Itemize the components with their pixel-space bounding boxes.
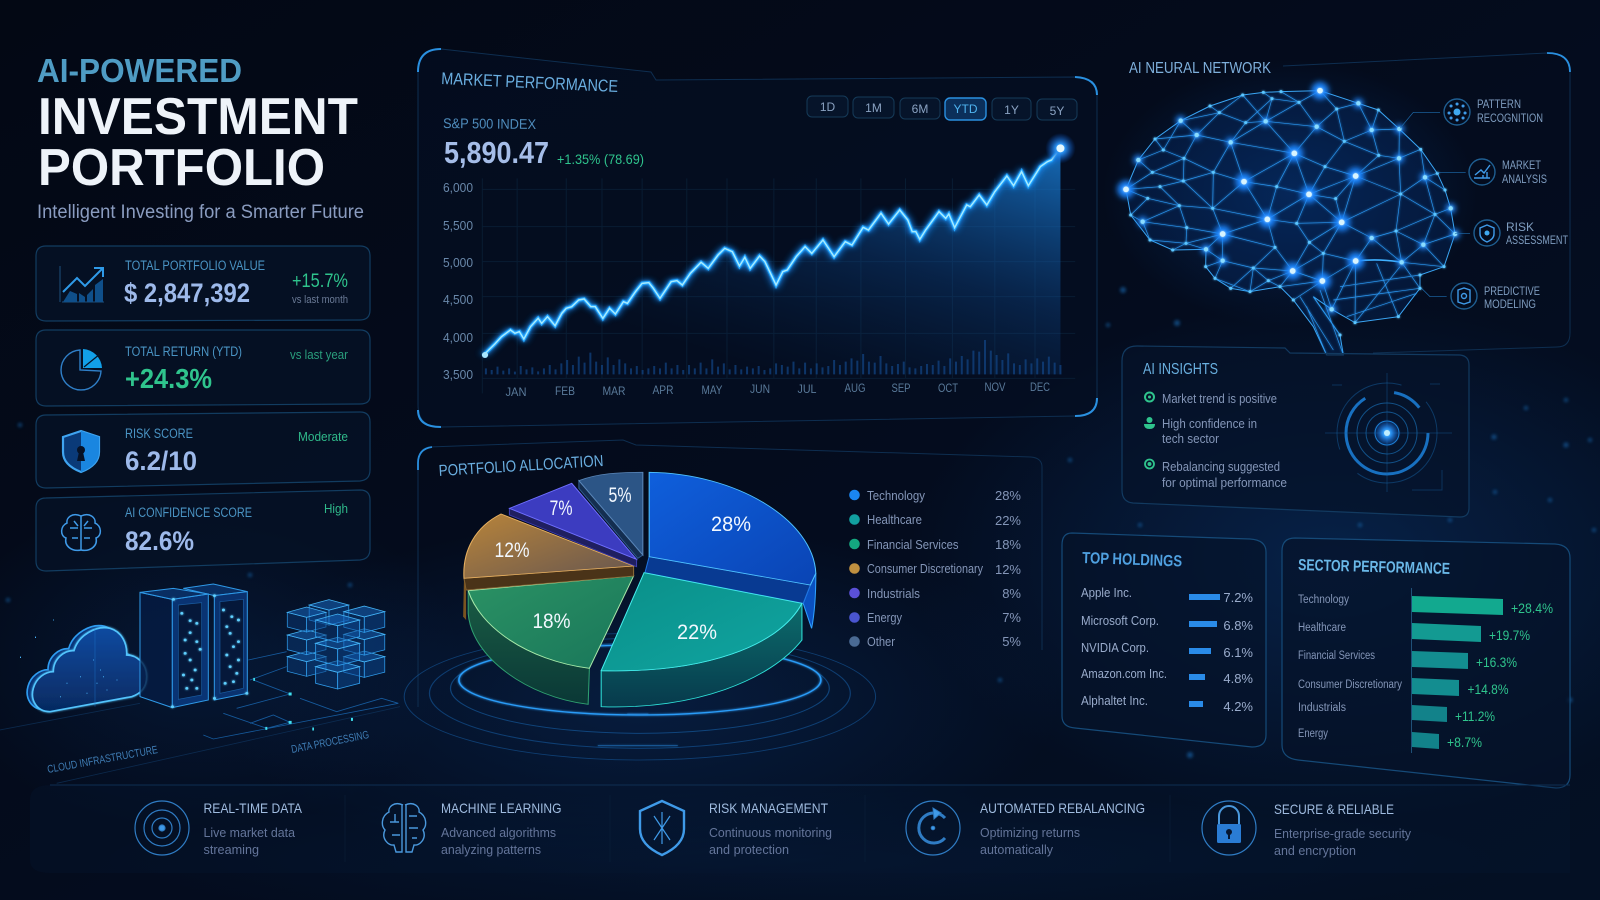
card: total portfolio value: [36, 246, 370, 321]
panel: AI insights: [1122, 346, 1469, 517]
slice: technology 28%: [645, 472, 816, 628]
legend: [849, 488, 1021, 649]
value: 82.6%: [125, 526, 194, 556]
bar values: [1447, 600, 1553, 750]
feature: secure and reliable: Enterprise-grade security: [1274, 826, 1411, 841]
slice: industrials 7%: [509, 483, 637, 567]
holdings rows: Microsoft Corp.: [1081, 613, 1159, 628]
holdings rows: 6.8%: [1223, 618, 1253, 633]
label: data processing: DATA PROCESSING: [290, 729, 370, 756]
holdings rows: 7.2%: [1223, 590, 1253, 605]
icon: growth chart: [60, 266, 104, 302]
bar values: +16.3%: [1476, 654, 1517, 670]
label: TOTAL PORTFOLIO VALUE: [125, 258, 265, 273]
holdings rows: Apple Inc.: [1081, 585, 1132, 600]
sector names: Healthcare: [1298, 622, 1346, 634]
feature: automated rebalancing: AUTOMATED REBALANCING: [980, 800, 1145, 816]
bar values: +28.4%: [1511, 600, 1553, 616]
month labels: JAN: [506, 385, 526, 399]
panel: portfolio allocation: [404, 440, 1042, 760]
feature: secure and reliable: SECURE & RELIABLE: [1274, 801, 1394, 817]
insight: tech confidence: [1144, 416, 1257, 446]
month labels: OCT: [938, 381, 959, 395]
heading: AI INSIGHTS: [1143, 361, 1218, 378]
feature: real-time data: streaming: [204, 842, 259, 857]
legend: Financial Services: [867, 537, 959, 552]
holdings rows: 4.8%: [1223, 671, 1253, 686]
month labels: MAY: [702, 383, 722, 397]
feature: real-time data: REAL-TIME DATA: [204, 800, 303, 816]
label: AI CONFIDENCE SCORE: [125, 505, 252, 520]
y axis labels: 4,500: [443, 292, 473, 307]
legend: 12%: [995, 562, 1021, 577]
pie labels: 28%: [711, 513, 751, 536]
comparison: vs last year: [290, 347, 349, 362]
time range buttons: 6M: [912, 102, 928, 116]
y axis labels: 3,500: [443, 367, 473, 382]
insight: rebalancing: Rebalancing suggested: [1162, 459, 1280, 474]
holdings rows: 6.1%: [1223, 645, 1253, 660]
y axis labels: 4,000: [443, 330, 473, 345]
month labels: [506, 380, 1050, 399]
y axis labels: 5,500: [443, 218, 473, 233]
holdings rows: Amazon.com Inc.: [1081, 666, 1167, 681]
brain network: [1103, 60, 1477, 355]
callout: risk assessment: RISK: [1506, 220, 1534, 234]
month labels: FEB: [555, 384, 575, 398]
sector names: Technology: [1298, 594, 1349, 606]
time range buttons: 1D: [820, 100, 836, 114]
callout: market analysis: ANALYSIS: [1502, 172, 1547, 186]
pie labels: 5%: [608, 484, 632, 507]
feature: risk management: [640, 800, 832, 857]
title: Investment: INVESTMENT: [38, 88, 358, 146]
legend: 8%: [1002, 586, 1021, 601]
sector names: Industrials: [1298, 702, 1346, 714]
feature: automated rebalancing: [906, 800, 1145, 857]
index value: 5,890.47: [444, 135, 549, 170]
feature: machine learning: Advanced algorithms: [441, 825, 556, 840]
time range buttons: YTD: [954, 102, 978, 116]
feature: machine learning: MACHINE LEARNING: [441, 800, 562, 816]
circuits and platform: [0, 652, 400, 783]
sector names: Consumer Discretionary: [1298, 679, 1402, 691]
label: TOTAL RETURN (YTD): [125, 344, 242, 359]
feature: risk management: RISK MANAGEMENT: [709, 800, 828, 816]
feature: risk management: and protection: [709, 842, 789, 857]
value: $ 2,847,392: [124, 278, 250, 308]
rating: Moderate: [298, 429, 348, 444]
feature: real-time data: Live market data: [204, 825, 296, 840]
slice: other 5%: [579, 472, 643, 558]
insight: tech confidence: tech sector: [1162, 431, 1220, 446]
comparison: vs last month: [292, 294, 348, 306]
y axis labels: 6,000: [443, 180, 473, 195]
callout: pattern recognition: [1444, 97, 1543, 125]
legend: 22%: [995, 513, 1021, 528]
bar values: +8.7%: [1447, 734, 1482, 750]
month labels: AUG: [844, 381, 866, 395]
panel: sector performance: [1282, 538, 1570, 788]
subtitle: Intelligent Investing for a Smarter Future: [37, 202, 364, 223]
heading: AI NEURAL NETWORK: [1129, 60, 1271, 77]
bar values: +19.7%: [1489, 627, 1530, 643]
legend: 18%: [995, 537, 1021, 552]
holdings rows: NVIDIA Corp.: [1081, 640, 1149, 655]
feature strip: [30, 785, 1570, 873]
callout: predictive modeling: [1451, 283, 1540, 311]
label: cloud infrastructure: CLOUD INFRASTRUCTURE: [46, 744, 159, 776]
feature: machine learning: analyzing patterns: [441, 842, 541, 857]
card: risk score: [36, 412, 370, 488]
callout: risk assessment: [1474, 220, 1568, 247]
pie labels: [494, 484, 751, 644]
value: +24.3%: [125, 363, 212, 394]
3D pie chart: [463, 472, 816, 707]
bar chart: [1412, 588, 1503, 753]
legend: Healthcare: [867, 512, 922, 527]
card: total return: [36, 330, 370, 406]
slice: healthcare 22%: [601, 573, 802, 707]
pie labels: 18%: [532, 610, 570, 633]
heading: MARKET PERFORMANCE: [441, 69, 618, 96]
index label: S&P 500 INDEX: [443, 115, 537, 132]
legend: Energy: [867, 610, 902, 625]
insight: tech confidence: High confidence in: [1162, 416, 1257, 431]
pie base rings: [404, 633, 876, 760]
month labels: DEC: [1030, 380, 1050, 394]
sector names: [1298, 594, 1402, 740]
icon: data cubes: [287, 600, 385, 689]
holdings rows: [1081, 585, 1253, 714]
month labels: SEP: [892, 381, 910, 395]
time range buttons: 5Y: [1050, 104, 1064, 118]
icon: pie: [61, 349, 102, 390]
insight: rebalancing: for optimal performance: [1162, 475, 1287, 490]
insight: market trend: Market trend is positive: [1162, 391, 1277, 406]
change: +15.7%: [292, 271, 348, 292]
callout: predictive modeling: PREDICTIVE: [1484, 284, 1540, 298]
holdings rows: Alphaltet Inc.: [1081, 693, 1148, 708]
legend: Consumer Discretionary: [867, 561, 983, 576]
time range buttons: [807, 96, 1077, 120]
legend: Other: [867, 634, 896, 649]
sector names: Financial Services: [1298, 650, 1375, 662]
feature: secure and reliable: and encryption: [1274, 843, 1356, 858]
feature: risk management: Continuous monitoring: [709, 825, 832, 840]
title: AI-Powered: AI-POWERED: [37, 52, 242, 89]
month labels: APR: [652, 383, 674, 397]
legend: Industrials: [867, 586, 920, 601]
callout: risk assessment: ASSESSMENT: [1506, 233, 1568, 247]
month labels: MAR: [602, 384, 626, 398]
heading: TOP HOLDINGS: [1082, 550, 1183, 570]
pie labels: 22%: [677, 621, 717, 644]
time range buttons: 1M: [865, 101, 882, 115]
infrastructure illustration: [0, 584, 400, 783]
feature: real-time data: [135, 800, 303, 857]
panel: AI neural network: [1103, 53, 1570, 355]
panel: market performance: [418, 49, 1097, 427]
pie labels: 7%: [550, 497, 572, 520]
heading: SECTOR PERFORMANCE: [1298, 557, 1451, 578]
card: AI confidence: [36, 490, 370, 571]
y axis labels: 5,000: [443, 255, 473, 270]
month labels: NOV: [984, 380, 1006, 394]
title block: [37, 52, 364, 223]
month labels: JUL: [798, 382, 817, 396]
feature: automated rebalancing: automatically: [980, 842, 1053, 857]
feature: machine learning: [382, 800, 562, 857]
callout: market analysis: [1469, 158, 1547, 186]
heading: PORTFOLIO ALLOCATION: [438, 453, 604, 480]
callout: market analysis: MARKET: [1502, 158, 1542, 172]
value: 6.2/10: [125, 446, 197, 476]
y axis labels: [443, 180, 473, 382]
sector names: Energy: [1298, 728, 1328, 740]
time range buttons: 1Y: [1004, 103, 1019, 117]
icon: shield: [63, 431, 99, 472]
slice: consumer discretionary 12%: [463, 514, 634, 620]
label: RISK SCORE: [125, 426, 193, 441]
line chart: [482, 133, 1076, 393]
callout: pattern recognition: RECOGNITION: [1477, 111, 1543, 125]
callout: predictive modeling: MODELING: [1484, 297, 1536, 311]
icon: brain: [62, 515, 100, 550]
icon: cloud: [20, 620, 147, 712]
feature: secure and reliable: [1202, 801, 1411, 858]
rating: High: [324, 501, 348, 516]
month labels: JUN: [750, 382, 770, 396]
insight: rebalancing: [1145, 459, 1287, 490]
callout: pattern recognition: PATTERN: [1477, 97, 1521, 111]
bar values: +11.2%: [1455, 708, 1495, 724]
slice: financial services 18%: [468, 576, 634, 704]
pie labels: 12%: [494, 539, 530, 562]
icon: server racks: [140, 584, 247, 708]
holdings rows: 4.2%: [1223, 699, 1253, 714]
index change: +1.35% (78.69): [557, 151, 644, 167]
legend: 7%: [1002, 610, 1021, 625]
legend: 28%: [995, 488, 1021, 503]
legend: 5%: [1002, 634, 1021, 649]
bar values: +14.8%: [1468, 681, 1508, 697]
title: Portfolio: PORTFOLIO: [38, 139, 325, 197]
legend: Technology: [867, 488, 925, 503]
panel: top holdings: [1062, 533, 1266, 747]
feature: automated rebalancing: Optimizing returns: [980, 825, 1080, 840]
radar target graphic: [1325, 373, 1452, 492]
